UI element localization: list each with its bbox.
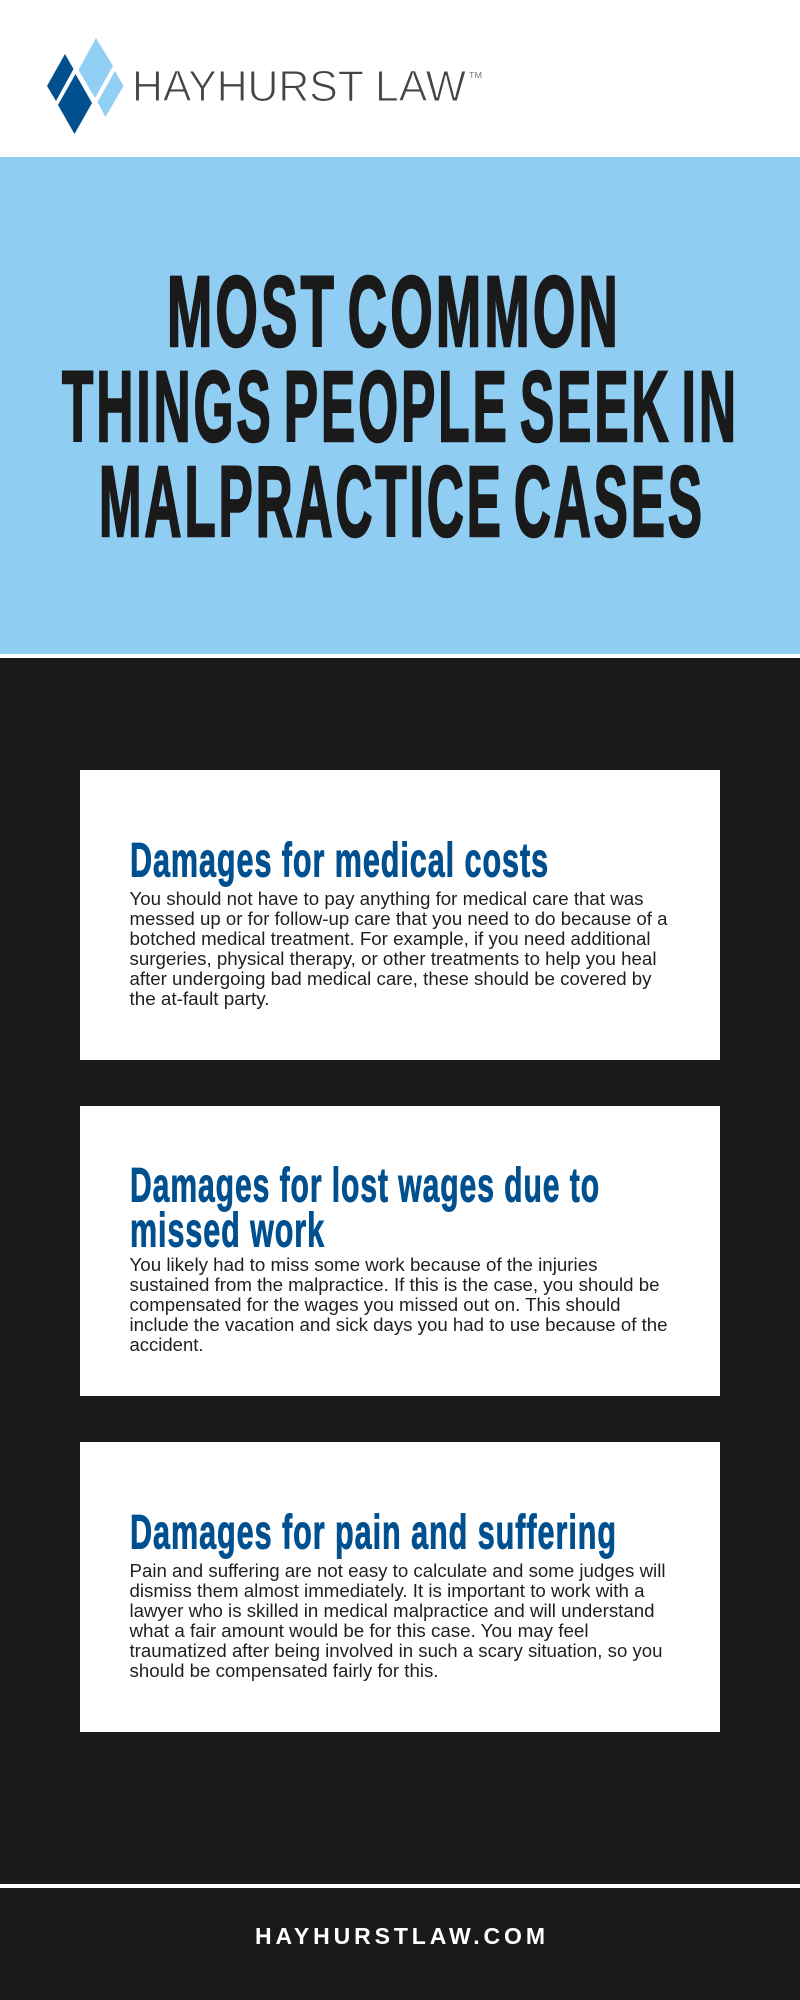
body text: lost wages: You likely had to miss some work because of the injuries bbox=[130, 1254, 598, 1275]
body text: medical costs: You should not have to pay anything for medical care that was bbox=[130, 888, 644, 909]
title bbox=[62, 256, 739, 558]
body text: pain and suffering bbox=[128, 1560, 666, 1681]
trademark mark: TM bbox=[469, 70, 482, 80]
body text: pain and suffering: dismiss them almost immediately. It is important to work with a bbox=[130, 1580, 645, 1601]
body text: pain and suffering: what a fair amount would be for this case. You may feel bbox=[128, 1620, 588, 1641]
body text: lost wages: sustained from the malpractice. If this is the case, you should be bbox=[130, 1274, 660, 1295]
body text: lost wages: include the vacation and sick days you had to use because of the bbox=[130, 1314, 668, 1335]
heading: lost wages: missed work bbox=[130, 1204, 325, 1258]
panel: dark content area bbox=[0, 658, 800, 1884]
body text: medical costs: botched medical treatment. For example, if you need additional bbox=[130, 928, 650, 949]
body text: medical costs: messed up or for follow-up care that you need to do because of a bbox=[130, 908, 668, 929]
panel: pain and suffering card bbox=[80, 1442, 720, 1732]
panel: lost wages card bbox=[80, 1106, 720, 1396]
panel: title banner bbox=[0, 157, 800, 654]
body text: medical costs: surgeries, physical therapy, or other treatments to help you heal bbox=[130, 948, 656, 969]
body text: pain and suffering: traumatized after being involved in such a scary situation, so you bbox=[130, 1640, 662, 1661]
body text: pain and suffering: should be compensated fairly for this. bbox=[130, 1660, 438, 1681]
body text: lost wages: compensated for the wages you missed out on. This should bbox=[130, 1294, 620, 1315]
body text: medical costs: the at-fault party. bbox=[130, 988, 270, 1009]
body text: pain and suffering: lawyer who is skilled in medical malpractice and will understand bbox=[130, 1600, 654, 1621]
body text: lost wages: accident. bbox=[130, 1334, 204, 1355]
body text: pain and suffering: Pain and suffering are not easy to calculate and some judges will bbox=[130, 1560, 666, 1581]
icon: diamonds bbox=[47, 38, 124, 134]
heading: lost wages bbox=[130, 1160, 600, 1258]
body text: lost wages bbox=[130, 1254, 668, 1355]
footer website: HAYHURSTLAW.COM bbox=[255, 1923, 545, 1949]
logo: Hayhurst Law bbox=[47, 38, 482, 134]
body text: medical costs bbox=[130, 888, 668, 1009]
footer bbox=[0, 1888, 800, 2000]
body text: medical costs: after undergoing bad medical care, these should be covered by bbox=[130, 968, 652, 989]
logo wordmark: HAYHURST LAW bbox=[132, 62, 466, 111]
heading: medical costs: Damages for medical costs bbox=[130, 834, 549, 888]
panel: medical costs card bbox=[80, 770, 720, 1060]
